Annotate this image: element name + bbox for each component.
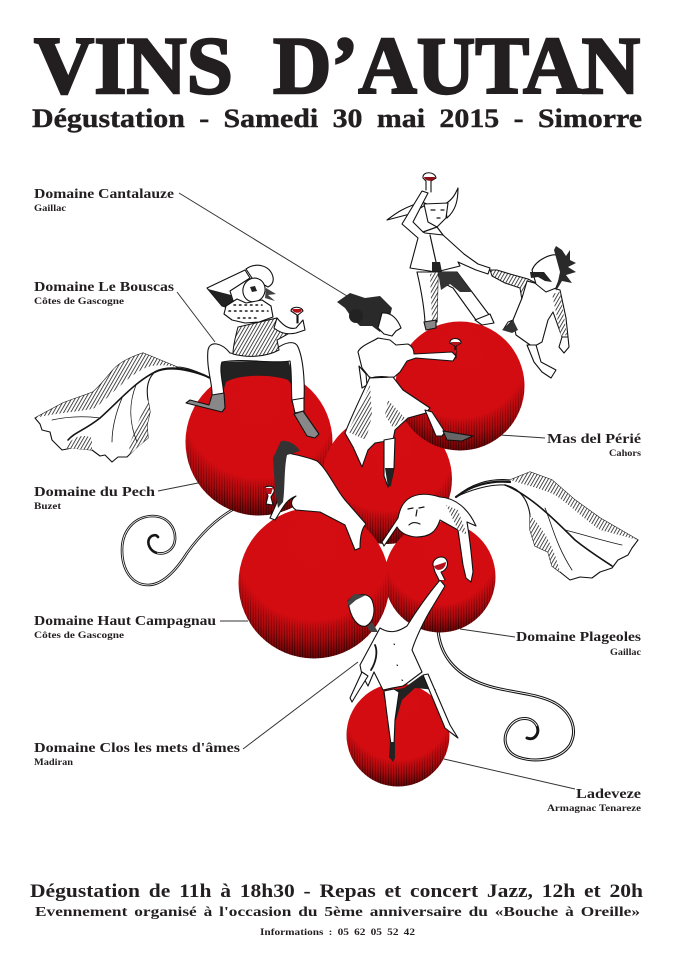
label: Domaine Cantalauze: Gaillac: [34, 203, 66, 213]
red ball: left: [186, 368, 332, 516]
label: Domaine Le Bouscas: Côtes de Gascogne: [34, 296, 124, 306]
leader lines: [158, 193, 575, 789]
subtitle: date and place: Dégustation - Samedi 30 mai 2015 - Simorre: [32, 104, 642, 133]
label: Domaine Haut Campagnau: Côtes de Gascogne: [34, 630, 124, 640]
tendril: left spiral: [122, 510, 232, 585]
label: Domaine Le Bouscas: Domaine Le Bouscas: [34, 279, 174, 294]
red ball: bottom: [346, 684, 450, 786]
label: Domaine Plageoles: Domaine Plageoles: [516, 629, 641, 644]
title: D’AUTAN: [273, 20, 640, 111]
label: Ladeveze: [547, 786, 641, 813]
label: Mas del Périé: [547, 431, 642, 458]
footer: schedule: Dégustation de 11h à 18h30 - Repas et concert Jazz, 12h et 20h: [30, 881, 643, 902]
tendril: right spiral: [438, 630, 574, 760]
label: Domaine Plageoles: Gaillac: [610, 647, 641, 657]
red ball: large: [238, 508, 390, 658]
figure: bearded man: [186, 265, 319, 438]
red ball: right: [384, 522, 496, 632]
footer: occasion: Evennement organisé à l'occasion du 5ème anniversaire du «Bouche à Oreille»: [35, 904, 640, 919]
footer: contact: Informations : 05 62 05 52 42: [260, 928, 415, 938]
label: Domaine Clos les mets d'âmes: Madiran: [34, 757, 73, 767]
figure: jester with glass: [387, 173, 494, 330]
title: [34, 20, 640, 111]
label: Domaine du Pech: [34, 484, 156, 511]
label: Mas del Périé: Cahors: [609, 448, 642, 458]
leaf: right: [456, 472, 638, 580]
label: Domaine du Pech: Domaine du Pech: [34, 484, 156, 499]
title: VINS: [34, 20, 233, 111]
figure: heavy man on ball: [382, 494, 476, 582]
label: Domaine Le Bouscas: [34, 279, 174, 306]
label: Domaine Cantalauze: [34, 186, 174, 213]
label: Domaine Plageoles: [516, 629, 641, 657]
label: Domaine Clos les mets d'âmes: Domaine Clos les mets d'âmes: [34, 740, 240, 755]
label: Domaine Clos les mets d'âmes: [34, 740, 240, 767]
label: Ladeveze: Ladeveze: [576, 786, 641, 801]
figure: crawling nude with glass: [265, 441, 366, 550]
figure: moustached man: [490, 246, 576, 378]
figure: man toasting on bottom ball: [347, 557, 458, 762]
figure: woman in dress: [337, 293, 473, 487]
red ball: top right: [396, 322, 524, 450]
leaf: left: [35, 353, 210, 462]
label: Domaine du Pech: Buzet: [34, 501, 61, 511]
label: Domaine Haut Campagnau: Domaine Haut Campagnau: [34, 613, 217, 628]
label: Domaine Cantalauze: Domaine Cantalauze: [34, 186, 174, 201]
red ball: center: [322, 414, 452, 544]
label: Mas del Périé: Mas del Périé: [547, 431, 641, 446]
label: Domaine Haut Campagnau: [34, 613, 217, 640]
label: Ladeveze: Armagnac Tenareze: [547, 803, 641, 813]
